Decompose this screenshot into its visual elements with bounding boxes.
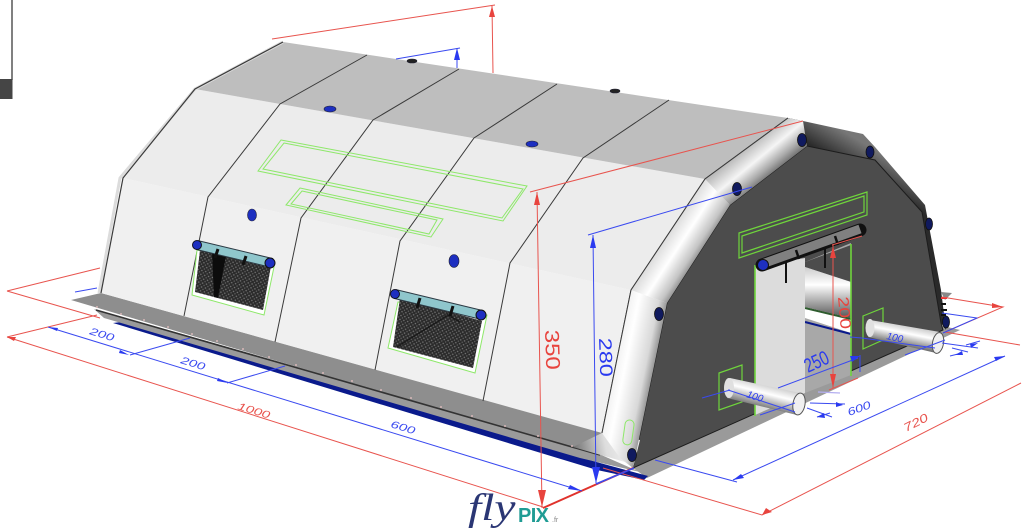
side window right xyxy=(388,290,487,373)
blue dimensions xyxy=(48,48,1005,491)
dimension label 1000: 1000 xyxy=(236,400,273,421)
dimension label 250: 250 xyxy=(800,346,833,377)
pipe dimension labels: 100 xyxy=(885,331,904,345)
dimension label 280: 280 xyxy=(595,337,616,377)
valves on side and roof xyxy=(248,59,620,268)
right pipe connection xyxy=(863,308,945,354)
side window left xyxy=(192,240,275,315)
base skirt and blue strip xyxy=(71,293,648,480)
front arch dark outer face xyxy=(788,118,946,330)
dimension labels 200 200 600: 600 xyxy=(389,418,418,437)
arch valves xyxy=(628,134,950,462)
rolled door on end wall xyxy=(758,229,860,270)
dimension labels 200 200 600: 200 xyxy=(178,354,208,373)
front end wall xyxy=(633,146,943,468)
outer edge of tent back xyxy=(99,42,283,293)
dimension label 600 end: 600 xyxy=(846,398,872,418)
right edge hardware xyxy=(941,292,952,315)
door opening and interior xyxy=(755,243,851,416)
roof panel xyxy=(195,42,803,179)
flypix logo: fly xyxy=(468,487,516,529)
green side sign outlines xyxy=(258,140,527,237)
flypix logo xyxy=(468,487,559,529)
dimension labels 200 200 600: 200 xyxy=(87,325,117,344)
flypix logo: .fr xyxy=(552,517,559,524)
ground shadow under tent xyxy=(633,326,960,478)
pipe dimension labels xyxy=(745,331,904,405)
top-left corner fragment xyxy=(0,0,12,99)
dimension labels 200 200 600 xyxy=(87,325,418,437)
dimension label 720: 720 xyxy=(901,411,931,434)
side wall of tent xyxy=(101,89,705,433)
panel seams xyxy=(101,42,788,433)
blue arrowheads xyxy=(48,48,1005,491)
green end wall sign xyxy=(739,192,867,258)
pipe dimension labels: 100 xyxy=(745,389,765,405)
dimension label 350: 350 xyxy=(540,329,564,370)
lavender guide near door xyxy=(818,392,840,393)
flypix logo: PIX xyxy=(518,505,550,527)
white inflatable arch tube xyxy=(573,118,807,468)
left pipe connection xyxy=(719,365,807,416)
dimension label 200 door: 200 xyxy=(835,296,855,330)
